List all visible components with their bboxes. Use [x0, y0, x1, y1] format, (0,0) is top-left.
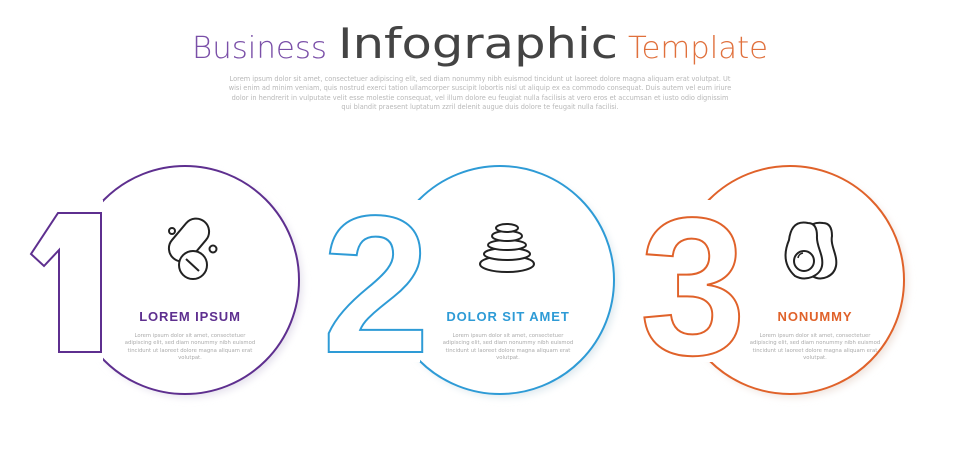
- title: Infographic: [338, 19, 618, 68]
- heading: step 2: DOLOR SIT AMET: [446, 309, 570, 324]
- text: step 1: Lorem ipsum dolor sit amet, consectetuer adipiscing elit, sed diam nonummy nibh euismod tincidunt ut laoreet dolore magna aliquam erat volutpat.: [125, 333, 255, 361]
- title: [192, 19, 768, 68]
- icon: pills: [164, 213, 216, 279]
- icon: avocado: [785, 223, 836, 278]
- text: step 2: Lorem ipsum dolor sit amet, consectetuer adipiscing elit, sed diam nonummy nibh euismod tincidunt ut laoreet dolore magna aliquam erat volutpat.: [443, 333, 573, 361]
- heading: step 1: LOREM IPSUM: [139, 309, 241, 324]
- panel: step 1: [0, 166, 302, 397]
- panel: step 3: [640, 166, 907, 397]
- number 3: 3: [640, 177, 746, 396]
- intro paragraph: Lorem ipsum dolor sit amet, consectetuer adipiscing elit, sed diam nonummy nibh euismod tincidunt ut laoreet dolore magna aliquam erat volutpat. Ut wisi enim ad minim veniam, quis nostrud exerci tation ullamcorper suscipit lobortis nisl ut aliquip ex ea commodo consequat. Duis autem vel eum iriure dolor in hendrerit in vulputate velit esse molestie consequat, vel illum dolore eu feugiat nulla facilisis at vero eros et accumsan et iusto odio dignissim qui blandit praesent luptatum zzril delenit augue duis dolore te feugait nulla facilisi.: [229, 75, 731, 111]
- number 2: 2: [322, 175, 430, 394]
- text: step 3: Lorem ipsum dolor sit amet, consectetuer adipiscing elit, sed diam nonummy nibh euismod tincidunt ut laoreet dolore magna aliquam erat volutpat.: [750, 333, 880, 361]
- title: Template: [628, 31, 768, 66]
- heading: step 3: NONUMMY: [778, 309, 852, 324]
- title: Business: [192, 31, 327, 66]
- number 1: [31, 213, 101, 352]
- panel: step 2: [320, 166, 617, 397]
- icon: stacked stones: [480, 224, 534, 272]
